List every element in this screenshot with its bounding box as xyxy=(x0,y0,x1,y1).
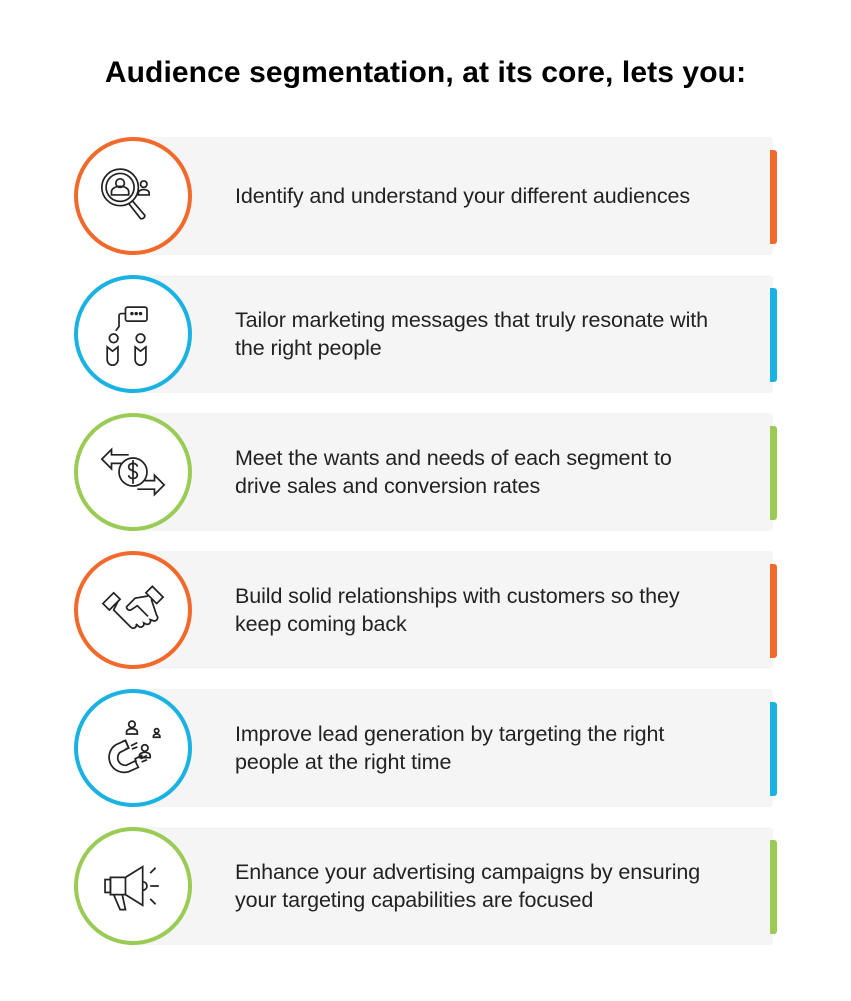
row 5 xyxy=(74,689,777,807)
row 1 xyxy=(74,137,777,255)
icon: conversation xyxy=(74,275,192,393)
icon: magnifier with people xyxy=(74,137,192,255)
row 3: drive sales and conversion rates xyxy=(235,474,540,498)
row 6: Enhance your advertising campaigns by ensuring xyxy=(235,860,700,884)
row 6 xyxy=(74,827,777,945)
icon: magnet attracting people xyxy=(74,689,192,807)
row 5: people at the right time xyxy=(235,750,451,774)
row 4: Build solid relationships with customers so they xyxy=(235,584,680,608)
row 4 xyxy=(74,551,777,669)
row 2: the right people xyxy=(235,336,382,360)
row 2 xyxy=(74,275,777,393)
icon: handshake xyxy=(74,551,192,669)
title: Audience segmentation, at its core, lets you: xyxy=(105,56,746,89)
icon: megaphone xyxy=(74,827,192,945)
row 1: Identify and understand your different audiences xyxy=(235,184,690,208)
row 6: your targeting capabilities are focused xyxy=(235,888,593,912)
row 3: Meet the wants and needs of each segment to xyxy=(235,446,672,470)
row 5: Improve lead generation by targeting the right xyxy=(235,722,664,746)
row 2: Tailor marketing messages that truly resonate with xyxy=(235,308,708,332)
row 3 xyxy=(74,413,777,531)
icon: dollar exchange xyxy=(74,413,192,531)
row 4: keep coming back xyxy=(235,612,407,636)
